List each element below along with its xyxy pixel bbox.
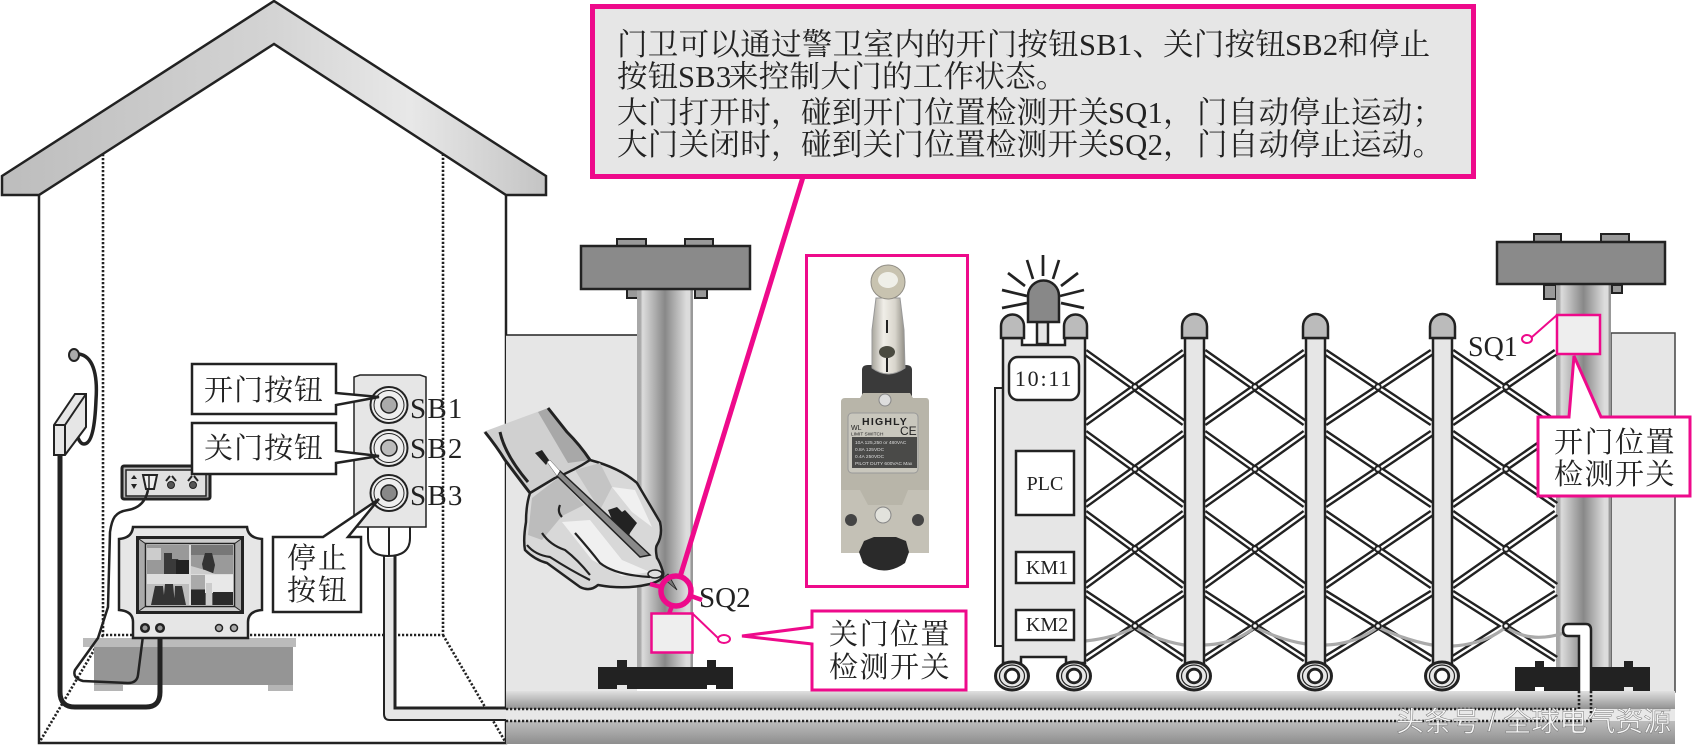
SQ1 switch box xyxy=(1557,315,1600,354)
callout: open button xyxy=(192,364,379,414)
sleeve shading xyxy=(538,408,590,463)
callout: close button xyxy=(192,423,379,474)
right gate pillar xyxy=(1497,234,1665,691)
switch rating plate: 10A 125,250 or 480VAC xyxy=(855,440,907,446)
callout: stop button xyxy=(273,499,379,612)
monitor camera views xyxy=(147,545,233,605)
lead gate post xyxy=(995,255,1087,663)
callout: open position switch: 开门位置 xyxy=(1554,426,1676,459)
highlight ring at SQ2 xyxy=(650,576,702,619)
wall socket and plug box xyxy=(54,349,96,455)
KM2 box: KM2 xyxy=(1026,614,1068,636)
main instruction callout: SB1、 xyxy=(1079,28,1163,62)
house xyxy=(2,1,546,743)
main instruction callout: 大门关闭时， xyxy=(617,128,802,162)
switch rating plate: 0.8A 125VDC xyxy=(855,447,885,453)
clock display: 10:11 xyxy=(1015,366,1073,391)
switch body: WL xyxy=(851,425,862,432)
switch lever xyxy=(862,265,912,398)
label SB2: SB2 xyxy=(410,433,464,465)
callout: stop button: 按钮 xyxy=(287,574,349,607)
folding lattice xyxy=(1085,352,1564,659)
callout: close button: 关门按钮 xyxy=(204,432,324,465)
PLC box: PLC xyxy=(1027,473,1063,495)
main instruction callout: SQ1， xyxy=(1108,96,1194,130)
switch body: LIMIT SWITCH xyxy=(851,432,884,438)
main instruction callout: 门卫可以通过警卫室内的开门按钮 xyxy=(617,28,1079,62)
lattice posts xyxy=(1182,314,1455,664)
main instruction callout: 来控制大门的工作状态。 xyxy=(728,60,1067,94)
conduit from button box xyxy=(368,527,506,720)
main instruction callout: 和停止 xyxy=(1338,28,1430,62)
wall right of gate xyxy=(1611,333,1675,692)
inner room dotted outline xyxy=(39,154,506,743)
main instruction callout: SB3 xyxy=(678,60,731,94)
monitor screen frame xyxy=(138,538,242,612)
main instruction callout: 大门打开时， xyxy=(617,96,802,130)
main instruction callout: 门自动停止运动； xyxy=(1197,96,1443,130)
callout: open button: 开门按钮 xyxy=(204,374,324,407)
KM2 box xyxy=(1016,610,1074,640)
label SB3: SB3 xyxy=(410,480,464,512)
main instruction callout xyxy=(592,6,1474,176)
callout: close position switch: 关门位置 xyxy=(829,618,951,651)
table xyxy=(83,638,296,691)
button SB3 xyxy=(370,475,408,511)
watermark: 头条号 / 全球电气资源 xyxy=(1396,706,1671,737)
pencil xyxy=(535,450,677,590)
main instruction callout: 门自动停止运动。 xyxy=(1197,128,1443,162)
roof xyxy=(2,1,546,195)
gate wheels xyxy=(996,662,1458,690)
left gate pillar xyxy=(581,239,750,689)
callout: open position switch: 检测开关 xyxy=(1554,458,1676,491)
label SQ1: SQ1 xyxy=(1468,332,1518,363)
button SB1 xyxy=(370,387,408,423)
SQ2 leader with node xyxy=(693,614,730,643)
main instruction callout: 关门按钮 xyxy=(1163,28,1286,62)
finger lines xyxy=(527,505,650,580)
PLC box xyxy=(1016,451,1074,515)
hand shape xyxy=(524,460,663,589)
power strip xyxy=(122,466,210,499)
thin monitor cable xyxy=(74,490,148,683)
main instruction callout: SQ2， xyxy=(1108,128,1194,162)
leader from callout to SQ2 xyxy=(680,177,803,577)
sleeve xyxy=(483,408,590,495)
thick monitor cable xyxy=(60,455,160,707)
warning lamp xyxy=(1002,255,1084,344)
monitor xyxy=(119,527,262,638)
switch rating plate: 0.4A 250VDC xyxy=(855,454,885,460)
switch body xyxy=(841,393,929,570)
house walls xyxy=(39,195,506,743)
callout: stop button: 停止 xyxy=(287,542,349,575)
sleeve outlines xyxy=(485,408,590,493)
hand shading xyxy=(528,478,584,540)
right conduit xyxy=(1563,624,1591,721)
SQ1 leader with node xyxy=(1522,315,1557,343)
clock display xyxy=(1009,357,1079,400)
switch rating plate: PILOT DUTY 600VAC Max xyxy=(855,461,913,467)
callout: open position switch xyxy=(1538,356,1690,496)
label SQ2: SQ2 xyxy=(699,582,751,614)
label SB1: SB1 xyxy=(410,393,464,425)
callout: close position switch: 检测开关 xyxy=(829,651,951,684)
switch rating plate xyxy=(852,437,917,468)
button SB2 xyxy=(370,430,408,466)
wall left of gate xyxy=(506,335,637,692)
SQ2 switch box xyxy=(652,614,692,652)
fingernail xyxy=(648,570,662,578)
button box xyxy=(354,375,426,527)
wall top edge xyxy=(506,334,637,336)
knuckle shadow xyxy=(608,507,637,541)
photo of limit switch xyxy=(806,256,968,586)
lamp base domes xyxy=(1001,314,1024,338)
switch body: HIGHLY xyxy=(862,416,908,428)
KM1 box xyxy=(1016,552,1074,583)
callout: close position switch xyxy=(742,611,966,690)
switch body: CE xyxy=(900,424,917,438)
main instruction callout: 碰到开门位置检测开关 xyxy=(801,96,1109,130)
main instruction callout: 碰到关门位置检测开关 xyxy=(801,128,1109,162)
hand holding pencil xyxy=(483,408,677,590)
main instruction callout: 按钮 xyxy=(617,60,679,94)
KM1 box: KM1 xyxy=(1026,557,1068,579)
ground xyxy=(506,691,1675,744)
main instruction callout: SB2 xyxy=(1285,28,1338,62)
